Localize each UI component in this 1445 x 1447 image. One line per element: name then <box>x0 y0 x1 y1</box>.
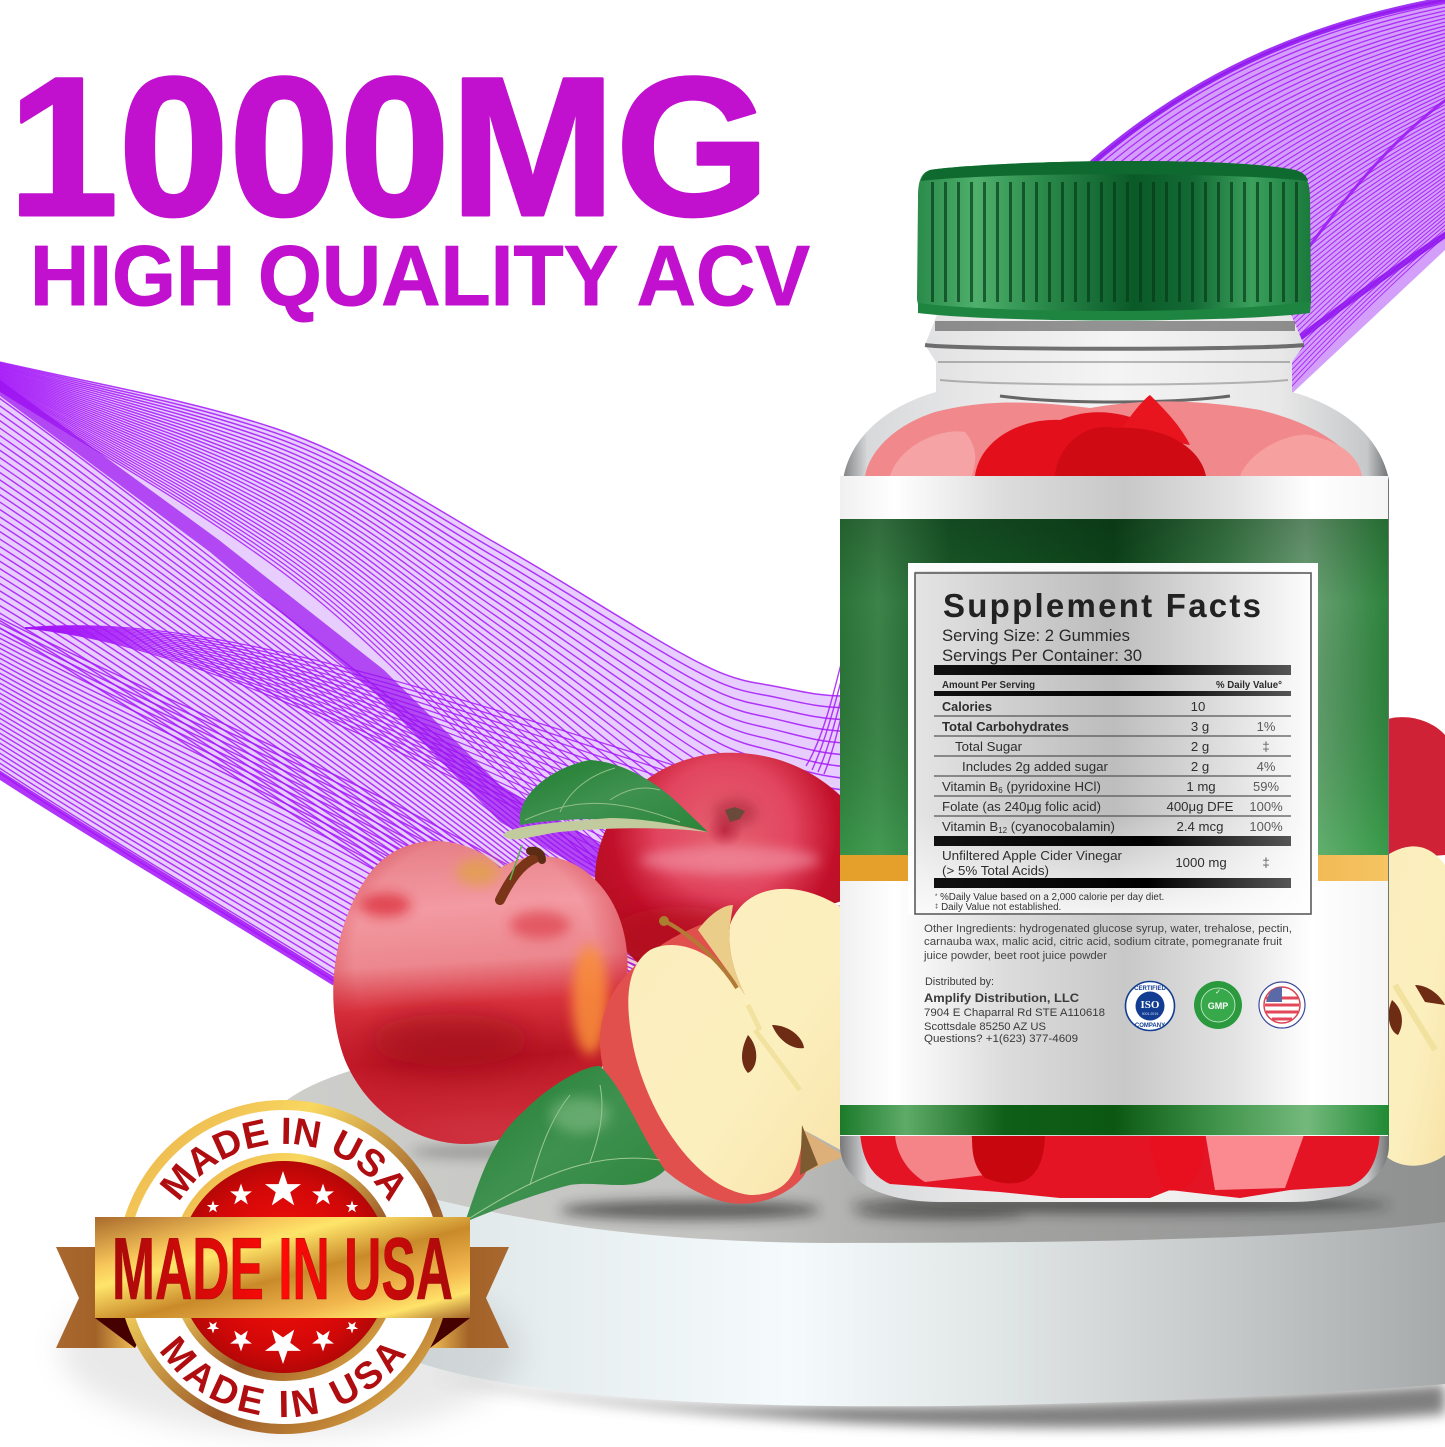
distributor block: Amplify Distribution, LLC <box>924 991 1079 1005</box>
front whole apple <box>333 841 628 1144</box>
bottom leaf <box>465 1066 665 1222</box>
other ingredients text: Other Ingredients: hydrogenated glucose syrup, water, trehalose, pectin, <box>924 923 1292 935</box>
nutrient rows: 6 <box>998 786 1003 795</box>
nutrient rows: (> 5% Total Acids) <box>942 863 1049 878</box>
stars <box>207 1171 358 1364</box>
seal shadow <box>60 1265 520 1435</box>
column headers: % Daily Value° <box>1216 680 1282 691</box>
nutrient rows: (pyridoxine HCl) <box>1003 779 1101 794</box>
nutrient rows: Calories <box>942 699 992 714</box>
GMP certification badge: GMP <box>1208 1001 1228 1011</box>
ISO certification badge: ISO <box>1141 999 1160 1011</box>
serving info <box>942 627 1142 665</box>
amount column: 400μg DFE <box>1167 799 1234 814</box>
headline: 1000MG: 1000MG <box>8 36 770 257</box>
purple wave: left ribbon of fine lines <box>0 361 860 1190</box>
ISO certification badge: COMPANY <box>1135 1023 1165 1029</box>
green upper band <box>840 519 1388 855</box>
right whole apple <box>1380 717 1445 860</box>
serving info: Serving Size: 2 Gummies <box>942 627 1130 645</box>
footnotes <box>935 892 1164 913</box>
ribbon tails <box>56 1247 509 1348</box>
podium top face <box>240 1053 1445 1260</box>
distributor block: Scottsdale 85250 AZ US <box>924 1021 1046 1033</box>
footnotes: * <box>935 894 938 900</box>
apples peeking out on the right <box>1380 717 1445 1166</box>
amount column: 1000 mg <box>1175 855 1227 870</box>
daily value column: 4% <box>1257 759 1276 774</box>
column headers: Amount Per Serving <box>942 680 1035 691</box>
right cut apple <box>1380 846 1445 1166</box>
other ingredients text: juice powder, beet root juice powder <box>923 950 1107 962</box>
nutrient rows: Total Carbohydrates <box>942 719 1069 734</box>
distributor block: 7904 E Chaparral Rd STE A110618 <box>924 1007 1105 1019</box>
green lower band <box>840 1105 1389 1135</box>
GMP certification badge <box>1194 981 1242 1029</box>
supplement facts panel <box>908 563 1318 915</box>
USA flag badge <box>1259 982 1305 1028</box>
daily value column: 1% <box>1257 719 1276 734</box>
other ingredients text: carnauba wax, malic acid, citric acid, sodium citrate, pomegranate fruit <box>924 936 1282 948</box>
amount column: 2 g <box>1191 739 1209 754</box>
nutrient rows: Total Sugar <box>955 739 1023 754</box>
lower arc text: MADE IN USA <box>160 1336 406 1418</box>
back apple <box>595 753 845 965</box>
daily value column: 59% <box>1253 779 1279 794</box>
gold ribbon band <box>95 1217 470 1318</box>
nutrient rows: Folate (as 240μg folic acid) <box>942 799 1101 814</box>
subheading: high quality ACV: HIGH QUALITY ACV <box>30 229 810 324</box>
serving info: Servings Per Container: 30 <box>942 647 1142 665</box>
distributor block <box>924 976 1105 1045</box>
distributor block: Distributed by: <box>925 976 994 988</box>
shadows under apples and bottle <box>410 1146 1390 1220</box>
purple wave: top right ribbon of fine lines <box>1090 0 1445 650</box>
footnotes: %Daily Value based on a 2,000 calorie per day diet. <box>937 892 1164 903</box>
inner gold ring and red disc <box>170 1153 398 1381</box>
white label base <box>840 476 1388 1136</box>
neck threads <box>925 326 1304 402</box>
Made in USA seal <box>56 1100 520 1439</box>
amount column <box>1167 699 1234 870</box>
ISO certification badge: CERTIFIED <box>1134 986 1166 992</box>
daily value column: 100% <box>1249 819 1283 834</box>
other ingredients text <box>923 923 1292 962</box>
amount column: 2.4 mcg <box>1177 819 1223 834</box>
podium side face <box>420 1197 1445 1406</box>
amount column: 1 mg <box>1186 779 1216 794</box>
column headers <box>942 680 1282 691</box>
nutrient rows: Vitamin B <box>942 819 998 834</box>
cut apple half <box>600 889 845 1204</box>
gummies in top of jar <box>865 395 1362 476</box>
nutrient rows: 12 <box>998 826 1008 835</box>
gummies in bottom of jar <box>860 1132 1380 1198</box>
footnotes: Daily Value not established. <box>938 902 1061 913</box>
daily value column: ‡ <box>1262 739 1270 754</box>
nutrient rows: Vitamin B <box>942 779 998 794</box>
daily value column <box>1249 719 1283 870</box>
nutrient rows <box>942 699 1123 878</box>
glass neck and shoulders <box>840 312 1389 1202</box>
podium soft shadow <box>430 1365 1445 1428</box>
daily value column: 100% <box>1249 799 1283 814</box>
daily value column: ‡ <box>1262 855 1270 870</box>
screw cap <box>917 161 1311 320</box>
orange stripe <box>840 855 1388 881</box>
amount column: 2 g <box>1191 759 1209 774</box>
podium platform <box>240 1053 1445 1428</box>
nutrient rows: Includes 2g added sugar <box>962 759 1109 774</box>
supplement bottle <box>840 161 1389 1202</box>
amount column: 3 g <box>1191 719 1209 734</box>
outer gold ring and white disc <box>117 1100 451 1434</box>
ribbon text: MADE IN USA <box>112 1219 453 1318</box>
ISO certification badge: 9001:2015 <box>1142 1012 1158 1016</box>
distributor block: Questions? +1(623) 377-4609 <box>924 1033 1078 1045</box>
amount column: 10 <box>1191 699 1205 714</box>
panel title: Supplement Facts <box>943 587 1261 624</box>
upper arc text: MADE IN USA <box>160 1118 404 1202</box>
footnotes: ‡ <box>935 904 938 910</box>
thick bars and rules <box>934 665 1291 888</box>
top leaf <box>503 760 708 839</box>
nutrient rows: Unfiltered Apple Cider Vinegar <box>942 848 1123 863</box>
GMP certification badge: ✓ <box>1215 989 1221 996</box>
product label <box>840 476 1389 1136</box>
ISO certification badge <box>1126 982 1174 1030</box>
apple pile on the left <box>333 753 845 1222</box>
nutrient rows: (cyanocobalamin) <box>1007 819 1115 834</box>
